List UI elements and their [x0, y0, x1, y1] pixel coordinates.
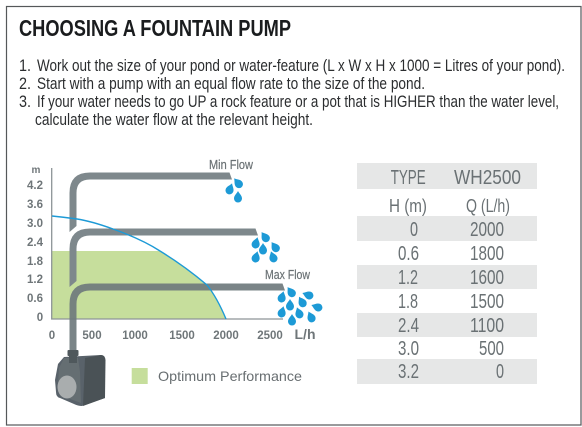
y axis labels: 0.6 — [27, 293, 43, 305]
legend swatch — [132, 368, 148, 384]
table header: TYPE — [391, 167, 426, 189]
y axis labels: 3.6 — [27, 199, 43, 211]
legend — [132, 368, 302, 384]
instructions text block: 1. — [19, 56, 31, 75]
y axis labels: 1.8 — [27, 256, 44, 268]
instructions text block: calculate the water flow at the relevant height. — [35, 110, 313, 129]
table values: 0.6 — [398, 243, 419, 265]
x axis labels: L/h — [294, 326, 316, 342]
instructions text block — [19, 56, 565, 129]
x axis labels: 1500 — [169, 330, 195, 342]
label: min flow: Min Flow — [209, 157, 254, 172]
y axis labels: 3.0 — [27, 218, 43, 230]
instructions text block: Start with a pump with an equal flow rate to the size of the pond. — [37, 74, 425, 93]
optimum performance area — [52, 251, 226, 319]
table values — [398, 219, 504, 383]
performance chart — [27, 157, 324, 350]
x axis labels: 2000 — [213, 330, 239, 342]
table header — [389, 167, 521, 216]
pipe: min flow — [70, 172, 232, 232]
drops: max flow — [277, 285, 324, 326]
table header: H (m) — [389, 196, 427, 216]
instructions text block: 2. — [19, 74, 31, 93]
pipe: max flow — [70, 284, 285, 350]
table row shading — [357, 163, 537, 384]
table values: 0 — [496, 361, 504, 383]
table values: 1.2 — [398, 267, 418, 289]
table values: 1600 — [470, 267, 504, 289]
table values: 0 — [410, 219, 418, 241]
x axis labels: 1000 — [122, 330, 148, 342]
y axis labels: 1.2 — [27, 274, 43, 286]
x axis labels: 500 — [82, 330, 102, 342]
table values: 1800 — [470, 243, 504, 265]
y axis labels: 0 — [37, 312, 43, 324]
label: max flow: Max Flow — [265, 267, 310, 282]
drops: min flow — [224, 176, 245, 202]
specification table — [357, 163, 537, 384]
table values: 1500 — [470, 291, 504, 313]
table values: 3.0 — [398, 338, 419, 360]
table values: 3.2 — [398, 361, 419, 383]
pump curve — [52, 216, 226, 319]
y axis labels: 4.2 — [27, 180, 43, 192]
x axis labels: 0 — [49, 330, 55, 342]
x axis labels: 2500 — [257, 330, 283, 342]
table values: 1100 — [470, 315, 504, 337]
table values: 2000 — [470, 219, 504, 241]
icon: pump — [55, 350, 106, 406]
table values: 500 — [479, 338, 504, 360]
x axis labels — [49, 326, 316, 342]
table header: Q (L/h) — [466, 196, 510, 216]
legend label: Optimum Performance — [158, 368, 302, 384]
y axis labels: m — [32, 165, 41, 176]
pipe: mid flow — [70, 228, 258, 287]
table values: 1.8 — [398, 291, 418, 313]
drops: mid flow — [251, 230, 281, 264]
axes — [52, 168, 283, 319]
y axis labels — [27, 165, 44, 324]
table values: 2.4 — [398, 315, 419, 337]
table header: WH2500 — [454, 167, 521, 189]
y axis labels: 2.4 — [27, 237, 44, 249]
instructions text block: 3. — [19, 92, 31, 111]
title: CHOOSING A FOUNTAIN PUMP — [19, 15, 291, 41]
